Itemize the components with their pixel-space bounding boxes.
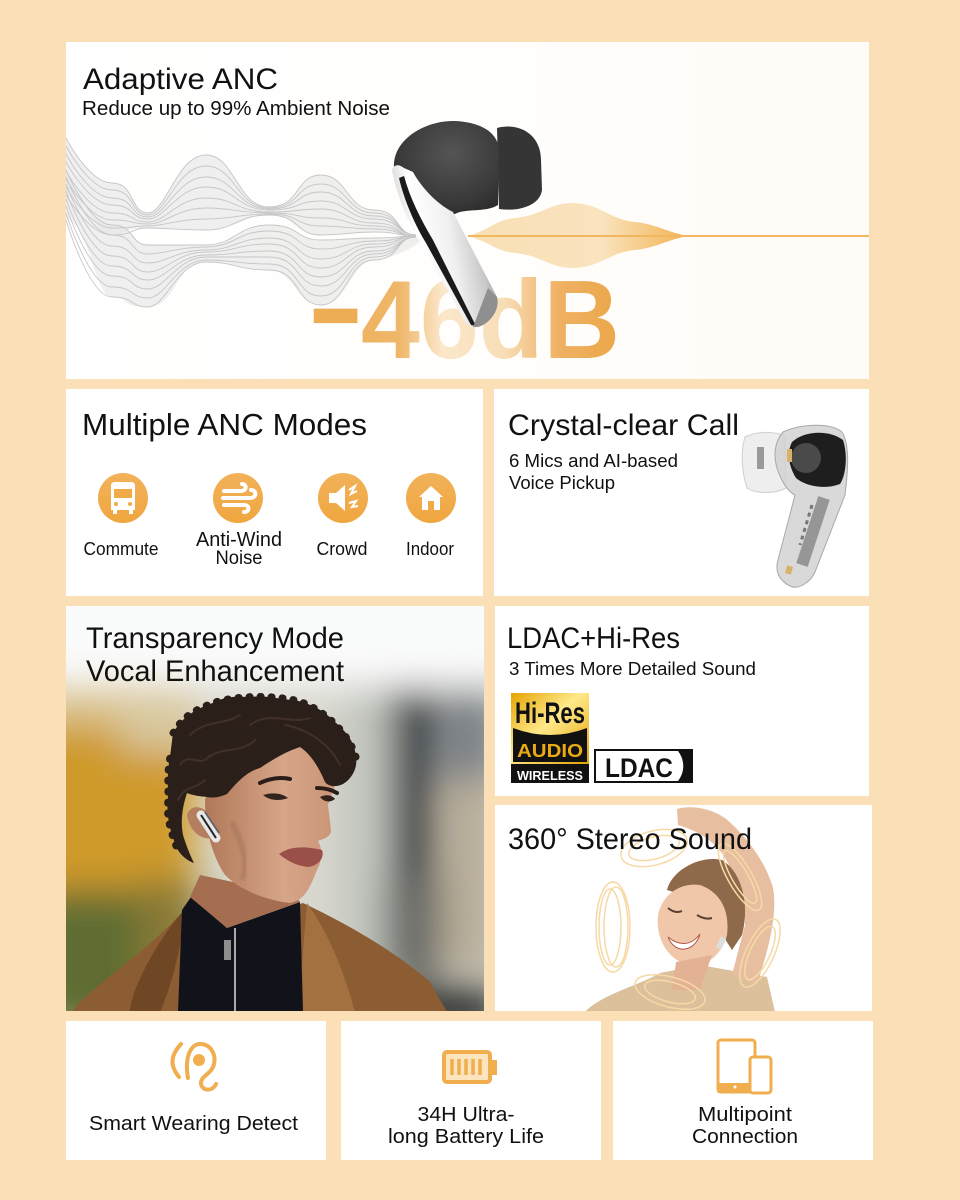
icon: commute bus xyxy=(98,473,148,523)
label: Multipoint Connection: Multipoint xyxy=(698,1103,792,1126)
person: smiling woman xyxy=(585,807,775,1012)
label: 34H Ultra-long Battery Life: long Battery Life xyxy=(388,1125,544,1148)
logo: Hi-Res Audio Wireless xyxy=(511,693,589,783)
heading: 360 Stereo Sound: 360° Stereo Sound xyxy=(508,823,752,856)
big number: -46dB: 46dB xyxy=(361,258,620,382)
label: Multipoint Connection: Connection xyxy=(692,1125,798,1148)
label: Multipoint Connection xyxy=(692,1103,798,1148)
text: microphones description: Voice Pickup xyxy=(509,472,615,493)
big number: -46dB xyxy=(307,237,620,382)
heading: Transparency Mode Vocal Enhancement: Transparency Mode xyxy=(86,622,344,655)
logo: LDAC xyxy=(594,749,693,783)
logo: LDAC: LDAC xyxy=(605,753,673,783)
logo: Hi-Res Audio Wireless: WIRELESS xyxy=(517,768,583,783)
label: Indoor: Indoor xyxy=(406,539,454,559)
subheading: noise reduction: Reduce up to 99% Ambient Noise xyxy=(82,97,390,120)
heading: Transparency Mode Vocal Enhancement: Vocal Enhancement xyxy=(86,655,344,688)
label: 34H Ultra-long Battery Life: 34H Ultra- xyxy=(418,1103,514,1126)
icon: indoor house xyxy=(406,473,456,523)
text: microphones description xyxy=(509,450,678,493)
label: Anti-Wind Noise xyxy=(196,529,282,569)
photo: blurred street background xyxy=(66,606,484,1011)
panel: multiple ANC modes xyxy=(66,389,483,596)
icon: ear xyxy=(172,1044,216,1090)
infographic canvas xyxy=(66,42,873,1160)
heading: Adaptive ANC: Adaptive ANC xyxy=(83,63,278,96)
subheading: detailed sound: 3 Times More Detailed Sound xyxy=(509,658,756,679)
icon: earbud on ear xyxy=(201,812,219,838)
panel: LDAC Hi-Res xyxy=(495,606,869,796)
person: man with earbud xyxy=(72,696,447,1012)
icon: crowd xyxy=(318,473,368,523)
heading: Multiple ANC Modes: Multiple ANC Modes xyxy=(82,407,367,442)
text: microphones description: 6 Mics and AI-based xyxy=(509,450,678,471)
panel: adaptive ANC xyxy=(66,42,869,382)
panel: smart wearing detect xyxy=(66,1021,326,1160)
label: Smart Wearing Detect: Smart Wearing Detect xyxy=(89,1112,298,1135)
icon: battery xyxy=(444,1052,497,1082)
logo: Hi-Res Audio Wireless: Hi-Res xyxy=(515,697,585,730)
icon: anti-wind xyxy=(213,473,263,523)
panel: multipoint connection xyxy=(613,1021,873,1160)
panel: 360 stereo sound xyxy=(495,805,872,1016)
panel: battery life xyxy=(341,1021,601,1160)
logo: Hi-Res Audio Wireless: AUDIO xyxy=(517,741,583,761)
label: 34H Ultra-long Battery Life xyxy=(388,1103,544,1148)
heading: LDAC+Hi-Res: LDAC+Hi-Res xyxy=(507,622,680,655)
chart: orange reduced wave xyxy=(468,203,869,268)
label: Anti-Wind Noise: Anti-Wind xyxy=(196,529,282,551)
sound rings xyxy=(596,823,788,1016)
heading: Transparency Mode Vocal Enhancement xyxy=(86,626,344,682)
big number: -46dB: - xyxy=(307,237,364,374)
product: black and silver earbud xyxy=(392,121,542,327)
panel: crystal-clear call xyxy=(494,389,869,596)
icon: tablet and phone xyxy=(717,1040,771,1093)
chart: grey noise wave xyxy=(66,138,422,307)
product: transparent earbud xyxy=(742,425,848,587)
label: Commute: Commute xyxy=(84,539,158,559)
heading: Crystal-clear Call: Crystal-clear Call xyxy=(508,409,739,442)
panel: transparency mode photo xyxy=(66,606,484,1011)
label: Anti-Wind Noise: Noise xyxy=(216,547,262,569)
label: Crowd: Crowd xyxy=(316,539,368,559)
